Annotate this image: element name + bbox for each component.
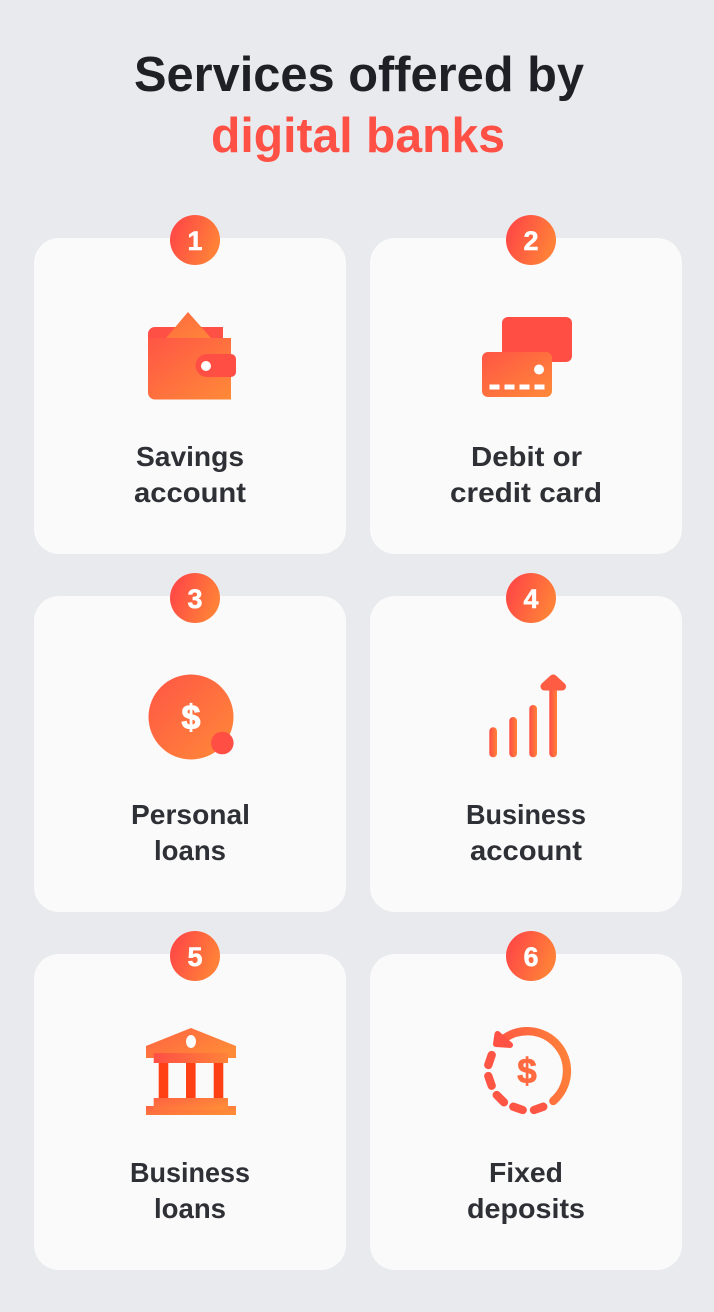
label: debit or credit card: Debit or: [471, 441, 582, 472]
label: personal loans: Personal: [131, 799, 250, 830]
label: savings account: [134, 441, 246, 508]
badge: number 2: [506, 215, 556, 265]
icon: rising bars with arrow: [489, 678, 562, 757]
label: business loans: Business: [130, 1157, 250, 1188]
label: personal loans: loans: [154, 835, 226, 866]
label: business loans: [130, 1157, 250, 1224]
label: fixed deposits: [467, 1157, 585, 1224]
panel: business account: [370, 573, 682, 912]
label: debit or credit card: [450, 441, 602, 508]
label: personal loans: [131, 799, 250, 866]
icon: bank building: [146, 1028, 236, 1115]
label: fixed deposits: deposits: [467, 1193, 585, 1224]
label: fixed deposits: Fixed: [489, 1157, 563, 1188]
panel: fixed deposits: [370, 931, 682, 1270]
icon: coin: $: [182, 699, 201, 737]
panel: business loans: [34, 931, 346, 1270]
badge: number 1: [170, 215, 220, 265]
badge: number 4: [506, 573, 556, 623]
badge: number 2: 2: [523, 226, 539, 256]
panel: savings account: [34, 215, 346, 554]
label: savings account: Savings: [136, 441, 244, 472]
icon: coin: [148, 674, 234, 760]
badge: number 6: [506, 931, 556, 981]
badge: number 5: 5: [187, 942, 203, 972]
label: business account: Business: [466, 799, 586, 830]
label: business account: account: [470, 835, 582, 866]
title: [134, 48, 584, 163]
label: debit or credit card: credit card: [450, 477, 602, 508]
badge: number 6: 6: [523, 942, 539, 972]
label: business loans: loans: [154, 1193, 226, 1224]
title: digital banks: [211, 109, 505, 163]
label: business account: [466, 799, 586, 866]
badge: number 4: 4: [523, 584, 539, 614]
badge: number 1: 1: [187, 226, 203, 256]
label: savings account: account: [134, 477, 246, 508]
icon: circular arrow with dollar: [488, 1031, 567, 1110]
panel: personal loans: [34, 573, 346, 912]
panel: debit or credit card: [370, 215, 682, 554]
icon: wallet: [148, 312, 236, 400]
icon: cards: [482, 317, 572, 397]
title: Services offered by: [134, 48, 584, 102]
badge: number 3: [170, 573, 220, 623]
icon: circular arrow with dollar: $: [517, 1052, 537, 1091]
badge: number 3: 3: [187, 584, 203, 614]
badge: number 5: [170, 931, 220, 981]
